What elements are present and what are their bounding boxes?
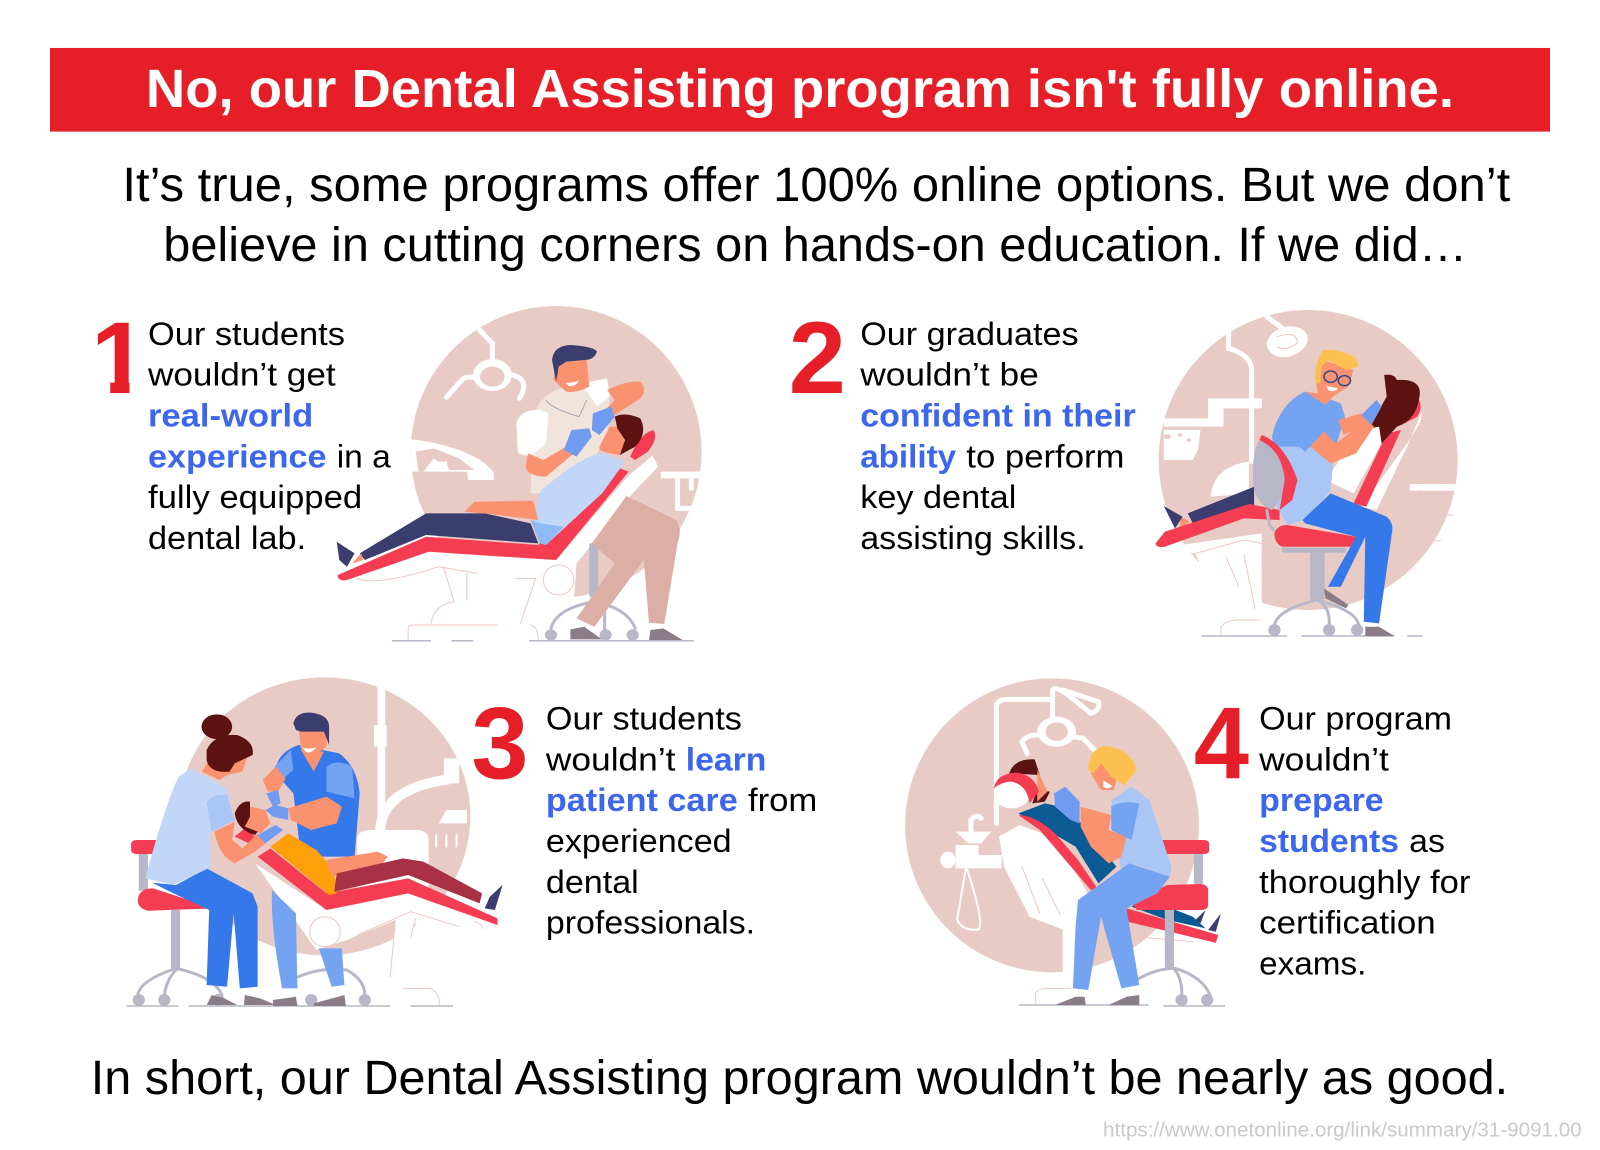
intro text	[122, 158, 1511, 272]
number 3: 3	[471, 687, 529, 801]
text block 3: from	[748, 781, 817, 818]
panel 2: confidence	[789, 301, 1461, 636]
illustration: blonde dentist on stool with patient	[905, 678, 1225, 1006]
intro text: It’s true, some programs offer 100% online options. But we don’t	[122, 158, 1511, 212]
text block 2: confident in their	[860, 397, 1136, 434]
text block 4: thoroughly for	[1259, 863, 1471, 900]
text block 2: Our graduates	[860, 315, 1079, 352]
intro text: believe in cutting corners on hands-on education. If we did…	[163, 218, 1467, 272]
conclusion text: In short, our Dental Assisting program wouldn’t be nearly as good.	[91, 1051, 1508, 1105]
text block 2: wouldn’t be	[859, 356, 1039, 393]
text block 2: assisting skills.	[860, 519, 1086, 556]
illustration: nurse and dentist treating child	[127, 677, 503, 1006]
text block 2: key dental	[860, 478, 1016, 515]
panel 1: real-world experience	[91, 301, 702, 643]
text block 3	[545, 700, 817, 941]
text block 2: to perform	[966, 437, 1124, 474]
title banner	[50, 48, 1550, 132]
source link: https://www.onetonline.org/link/summary/31-9091.00	[1103, 1120, 1582, 1142]
text block 4: certification	[1259, 904, 1436, 941]
panel 4: certification	[905, 678, 1471, 1006]
panel 3: patient care	[127, 677, 817, 1006]
text block 3: patient care	[546, 781, 738, 818]
title banner: No, our Dental Assisting program isn't fully online.	[146, 59, 1454, 119]
text block 4	[1258, 700, 1471, 981]
text block 3: dental	[546, 863, 639, 900]
text block 4: Our program	[1259, 700, 1452, 737]
text block 1: real-world	[148, 397, 313, 434]
text block 3: Our students	[546, 700, 742, 737]
text block 1: dental lab.	[148, 519, 306, 556]
text block 4: exams.	[1259, 944, 1366, 981]
text block 1: in a	[337, 437, 392, 474]
text block 4: as	[1409, 822, 1445, 859]
text block 3: wouldn’t	[545, 740, 676, 777]
text block 2	[859, 315, 1136, 556]
text block 1: experience	[148, 437, 327, 474]
text block 3: learn	[686, 740, 766, 777]
text block 3: professionals.	[546, 904, 755, 941]
text block 1: wouldn’t get	[147, 356, 336, 393]
illustration: dentist on stool treating patient	[1156, 310, 1461, 636]
text block 1: fully equipped	[148, 478, 362, 515]
text block 4: prepare	[1259, 781, 1384, 818]
illustration: dentist with reclined patient	[337, 306, 702, 643]
text block 4: wouldn’t	[1258, 740, 1389, 777]
number 2: 2	[789, 301, 846, 415]
number 4: 4	[1194, 687, 1249, 801]
text block 2: ability	[860, 437, 956, 474]
text block 1: Our students	[148, 315, 345, 352]
text block 3: experienced	[546, 822, 732, 859]
number 1: 1	[91, 301, 148, 415]
text block 4: students	[1259, 822, 1399, 859]
text block 1	[147, 315, 392, 556]
